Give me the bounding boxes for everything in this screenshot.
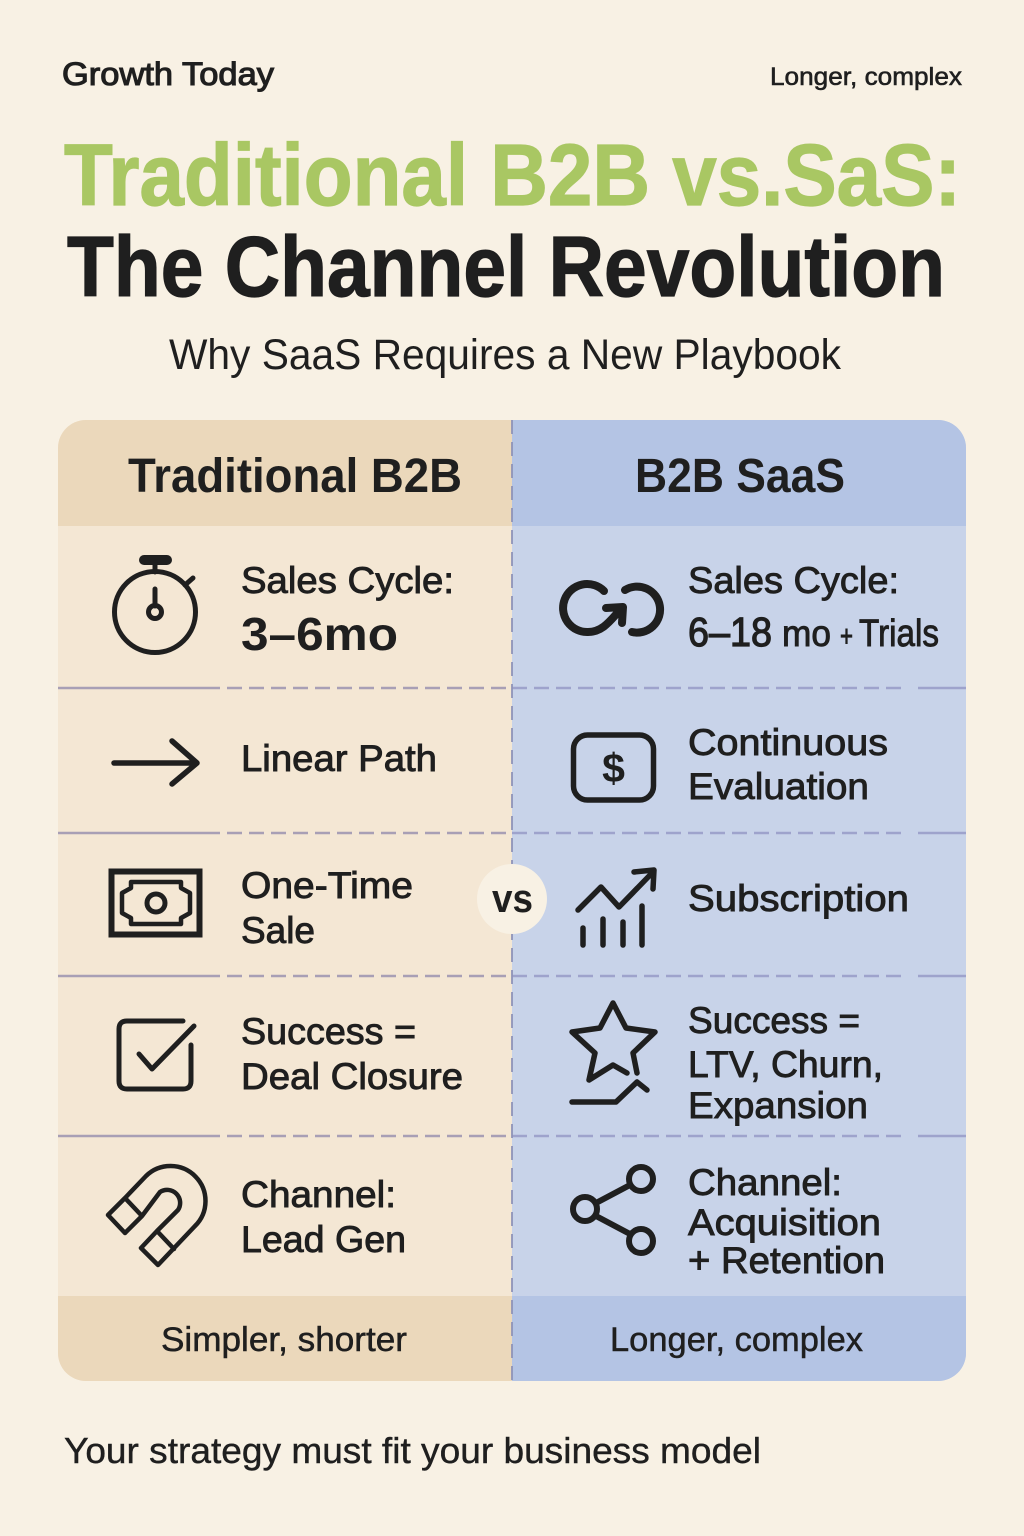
label: lead gen: Lead Gen xyxy=(241,1219,406,1260)
label: sales cycle: Sales Cycle: xyxy=(241,560,454,601)
left row: channel xyxy=(108,1166,406,1265)
label: expansion: Expansion xyxy=(688,1085,868,1126)
right row: sales cycle xyxy=(563,560,939,655)
footer: simpler, shorter: Simpler, shorter xyxy=(161,1321,407,1359)
left row: one-time sale xyxy=(112,865,413,951)
closing statement: Your strategy must fit your business model xyxy=(64,1430,761,1471)
value: trials: Trials xyxy=(859,613,939,655)
label: sales cycle: Sales Cycle: xyxy=(688,560,899,601)
right row: subscription xyxy=(578,870,909,945)
icon: banknote xyxy=(112,872,200,934)
label: subscription: Subscription xyxy=(688,878,909,919)
title line 1: Traditional B2B vs.SaS: xyxy=(64,127,961,224)
left row: sales cycle xyxy=(114,560,454,660)
icon: loop arrow xyxy=(563,584,660,633)
value: 6-18: 6–18 xyxy=(688,609,772,655)
value: plus: + xyxy=(840,620,853,653)
label: linear path: Linear Path xyxy=(241,738,437,779)
footer: longer, complex: Longer, complex xyxy=(610,1321,863,1359)
vs badge: vs xyxy=(492,877,533,921)
icon: arrow xyxy=(114,741,197,784)
label: success: Success = xyxy=(241,1011,416,1052)
label: channel: Channel: xyxy=(688,1162,842,1203)
vs badge xyxy=(477,864,547,934)
label: evaluation: Evaluation xyxy=(688,766,869,807)
icon: share nodes xyxy=(573,1167,653,1253)
top right tag: Longer, complex xyxy=(770,63,963,91)
label: LTV, churn: LTV, Churn, xyxy=(688,1044,883,1085)
right row: success xyxy=(572,1000,883,1126)
label: one-time sale: One-Time xyxy=(241,865,413,906)
label: channel: Channel: xyxy=(241,1174,396,1215)
icon: star with trend xyxy=(572,1003,655,1102)
label: retention: + Retention xyxy=(688,1240,885,1281)
label: deal closure: Deal Closure xyxy=(241,1056,463,1097)
value: mo: mo xyxy=(782,613,831,654)
left row: linear path xyxy=(114,738,437,784)
right row: channel xyxy=(573,1162,885,1281)
title line 2: The Channel Revolution xyxy=(67,220,945,315)
subtitle: Why SaaS Requires a New Playbook xyxy=(169,331,841,379)
label: acquisition: Acquisition xyxy=(688,1202,881,1243)
value: 3-6mo: 3–6mo xyxy=(241,608,398,660)
right row: continuous evaluation xyxy=(574,722,888,807)
icon: checkbox xyxy=(119,1021,194,1089)
brand name: Growth Today xyxy=(62,56,274,92)
icon: stopwatch xyxy=(114,560,196,652)
header: B2B SaaS: B2B SaaS xyxy=(635,450,845,503)
label: continuous: Continuous xyxy=(688,722,888,763)
comparison table xyxy=(58,420,966,1381)
icon: growth chart xyxy=(578,870,654,945)
icon: dollar card: $ xyxy=(602,745,625,791)
label line 2: Sale xyxy=(241,910,315,951)
header: Traditional B2B: Traditional B2B xyxy=(128,450,462,503)
left row: success xyxy=(119,1011,463,1097)
icon: dollar card xyxy=(574,735,654,800)
label: success: Success = xyxy=(688,1000,860,1041)
icon: magnet xyxy=(108,1166,205,1265)
